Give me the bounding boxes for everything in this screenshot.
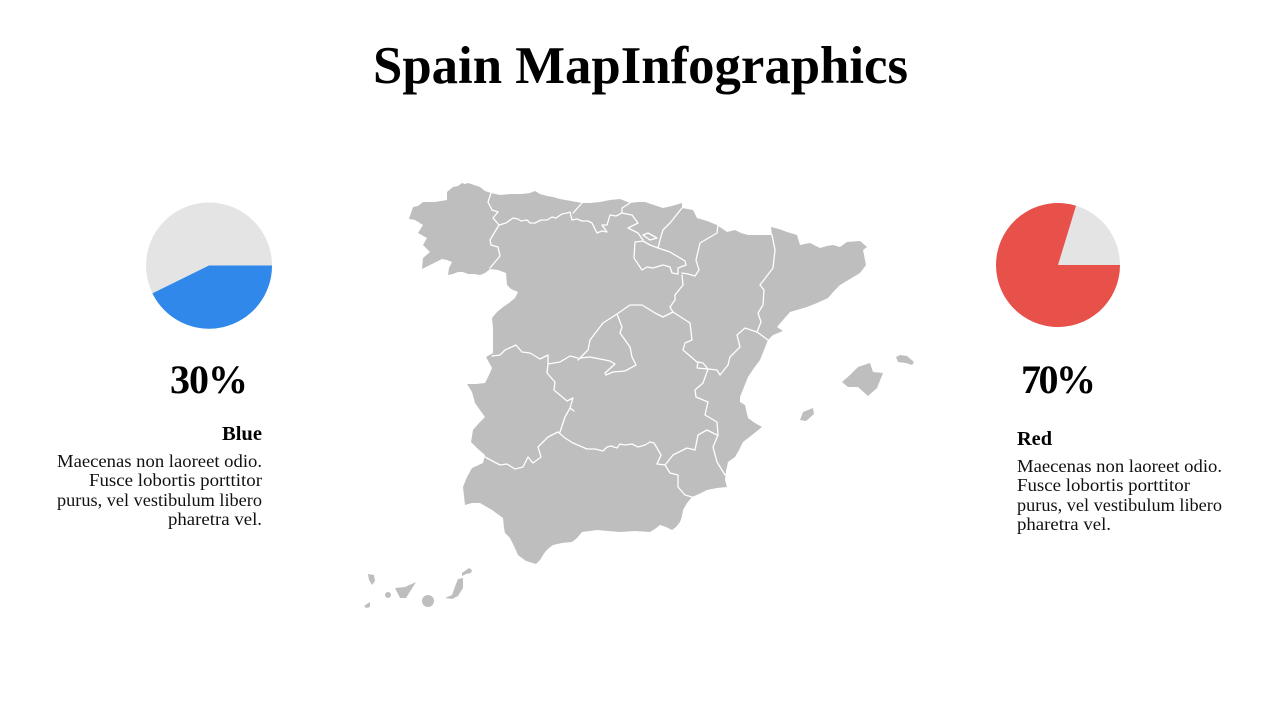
Balearic Islands (800, 355, 914, 421)
blue percentage: 30% (170, 357, 248, 402)
red percentage: 70% (1021, 357, 1096, 402)
blue pie chart (146, 202, 272, 329)
blue description: purus, vel vestibulum libero (57, 490, 262, 510)
map of Spain (364, 183, 914, 608)
blue description: pharetra vel. (168, 509, 262, 529)
blue description: Fusce lobortis porttitor (89, 470, 262, 490)
blue description: Maecenas non laoreet odio. (57, 451, 262, 471)
red description: Fusce lobortis porttitor (1017, 475, 1190, 495)
red heading: Red (1017, 428, 1052, 450)
title: Spain MapInfographics (373, 37, 908, 95)
mainland silhouette (409, 183, 867, 564)
region borders (485, 193, 775, 497)
Canary Islands (364, 568, 472, 608)
panel: red stat (996, 203, 1222, 534)
red description: Maecenas non laoreet odio. (1017, 456, 1222, 476)
blue description (57, 451, 262, 529)
red description: purus, vel vestibulum libero (1017, 495, 1222, 515)
blue heading: Blue (222, 423, 262, 445)
red description: pharetra vel. (1017, 514, 1111, 534)
red description (1017, 456, 1222, 534)
panel: blue stat (57, 202, 272, 529)
red pie chart (996, 203, 1120, 327)
